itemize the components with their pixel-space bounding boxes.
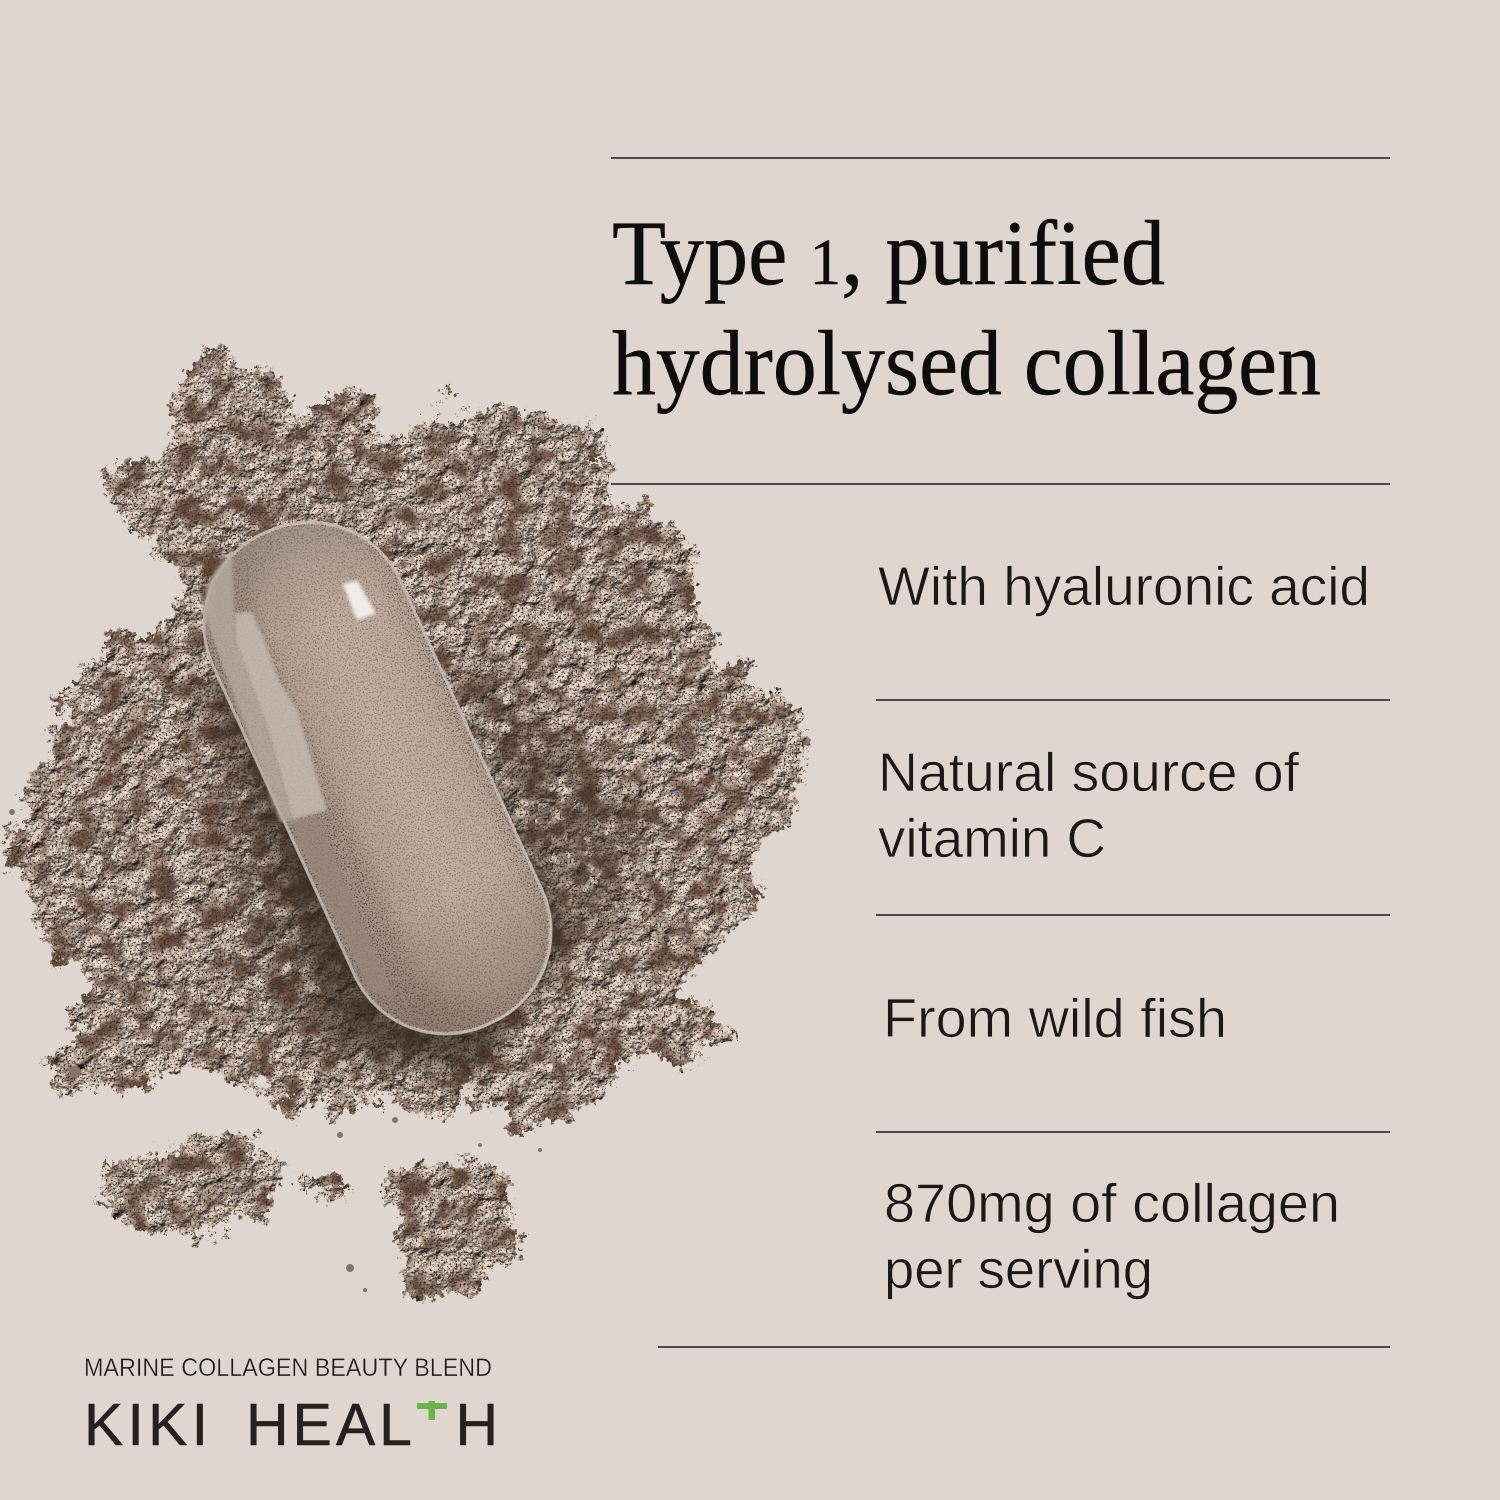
capsule inner powder — [233, 513, 563, 1024]
benefit: hyaluronic acid: With hyaluronic acid — [878, 555, 1370, 617]
capsule highlight — [341, 576, 376, 622]
capsule glass band — [203, 552, 293, 822]
benefit: collagen per serving: 870mg of collagen — [884, 1172, 1340, 1234]
benefit: vitamin C: vitamin C — [878, 807, 1106, 869]
dark patches beside capsule — [190, 640, 650, 1070]
rule below heading — [611, 483, 1390, 485]
capsule end shading — [175, 493, 580, 1063]
stray powder grains — [9, 740, 810, 1292]
logo word KIKI: KIKI — [84, 1392, 208, 1458]
logo word HEAL: HEAL — [246, 1392, 412, 1458]
capsule lower seam band — [290, 815, 395, 1000]
heading line 2: hydrolysed collagen — [612, 312, 1321, 414]
benefit: vitamin C — [878, 741, 1300, 869]
powder pile photo — [0, 345, 818, 1298]
rule 2 — [876, 914, 1390, 916]
rule 1 — [876, 699, 1390, 701]
rule above heading — [611, 157, 1390, 159]
heading — [612, 202, 1321, 414]
logo green plus — [417, 1401, 447, 1420]
rule 4 — [658, 1346, 1390, 1348]
benefit: wild fish: From wild fish — [883, 987, 1227, 1049]
capsule body — [170, 488, 585, 1068]
capsule inner reflection — [235, 612, 327, 820]
heading line 1: Type 1, purified — [612, 202, 1165, 304]
capsule shadow — [215, 525, 575, 1075]
logo final H: H — [456, 1392, 498, 1458]
benefit: vitamin C: Natural source of — [878, 741, 1300, 803]
powder mound — [0, 345, 818, 1298]
benefit: collagen per serving: per serving — [884, 1238, 1153, 1300]
product name: MARINE COLLAGEN BEAUTY BLEND — [84, 1354, 492, 1382]
capsule rim — [171, 490, 584, 1066]
brand logo — [84, 1392, 498, 1458]
rule 3 — [876, 1131, 1390, 1133]
capsule — [170, 488, 585, 1068]
benefit: collagen per serving — [884, 1172, 1340, 1300]
